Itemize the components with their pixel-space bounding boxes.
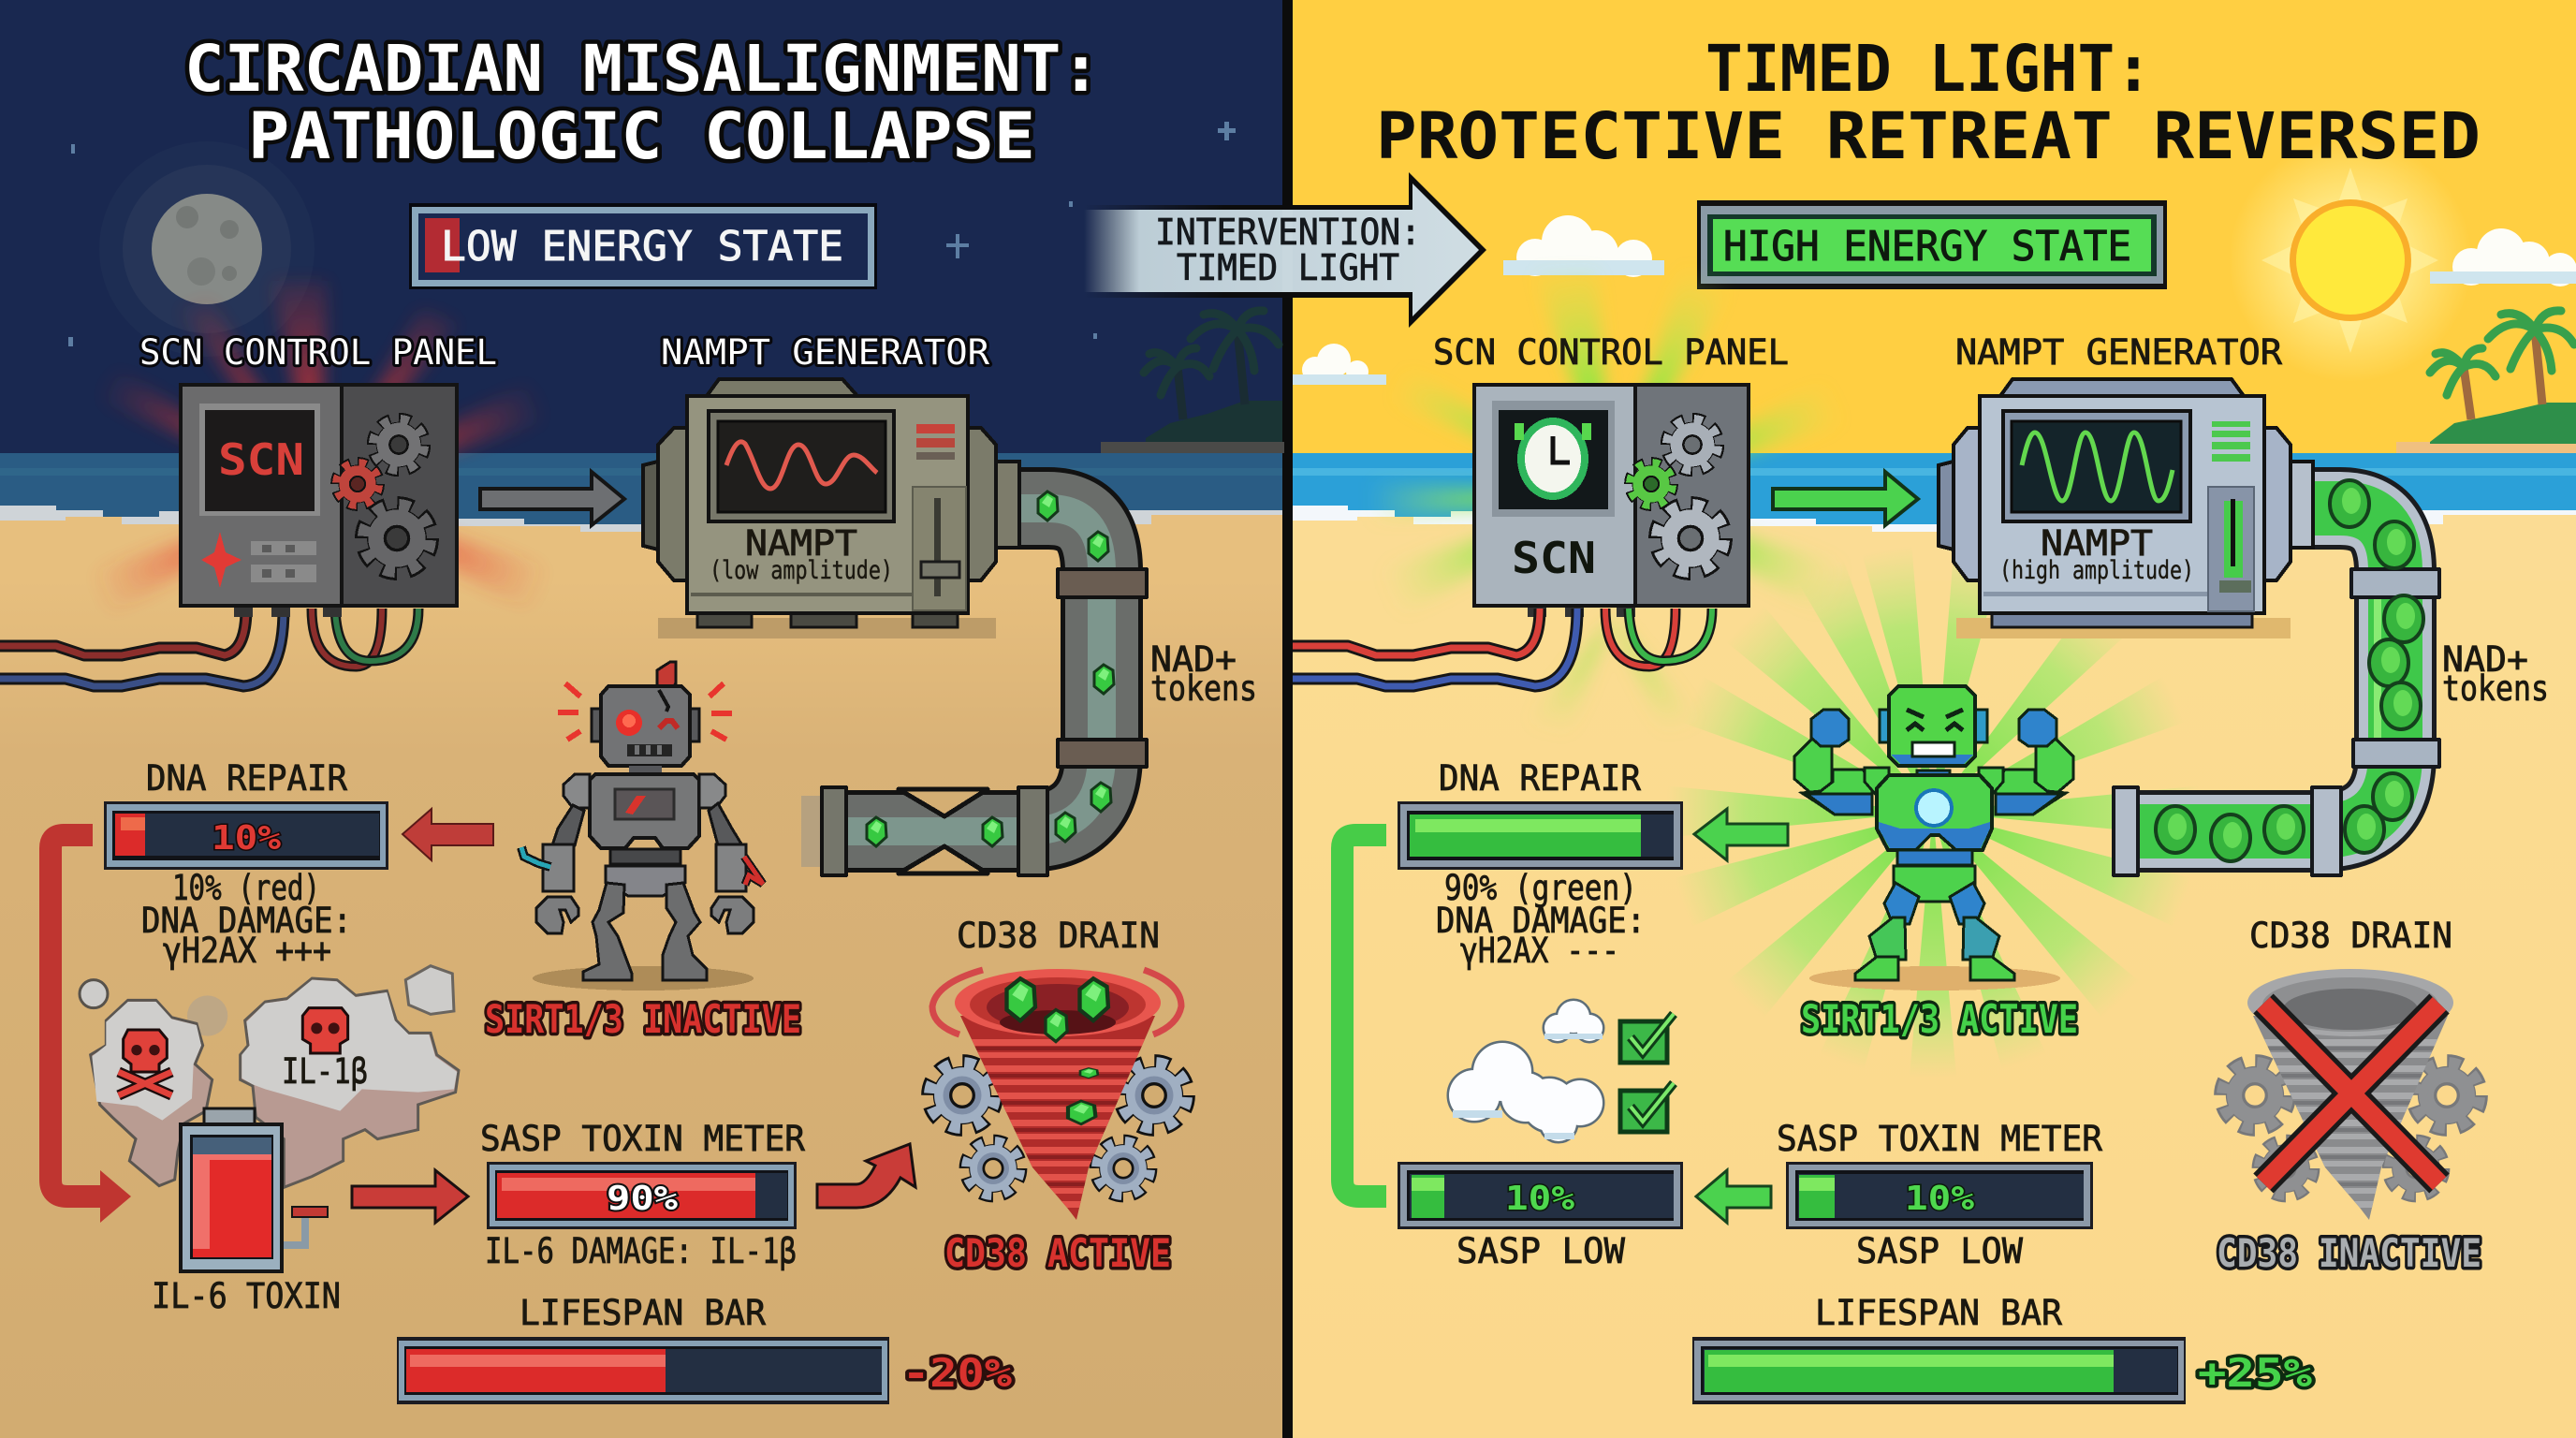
wires: left <box>0 609 418 686</box>
bar: SASP meter 10 percent: 10% <box>1905 1180 1974 1218</box>
bar: DNA repair 10 percent: 10% <box>212 819 281 858</box>
bar: DNA repair 10 percent <box>104 801 388 870</box>
icon: cloud left edge <box>1293 344 1386 385</box>
icon: clean clouds <box>1449 1001 1603 1141</box>
label: NAMPT low amplitude <box>710 523 893 585</box>
robot: active <box>1794 686 2073 990</box>
bar: SASP low first <box>1398 1162 1683 1229</box>
background: day beach <box>1288 0 2576 1438</box>
icon: moon <box>99 141 315 357</box>
SCN panel: left <box>179 383 459 617</box>
arrow: robot to DNA repair left <box>402 809 493 860</box>
arrow: intervention timed light <box>1084 172 1486 328</box>
label: CD38 inactive: CD38 INACTIVE <box>2217 1230 2481 1276</box>
label: CD38 drain left: CD38 DRAIN <box>957 916 1160 956</box>
generator: right <box>1939 379 2313 638</box>
icon: cloud right edge <box>2430 228 2576 286</box>
label: NAMPT low amplitude: NAMPT <box>745 523 857 564</box>
text: DNA damage left: DNA DAMAGE: <box>141 901 352 941</box>
arrow: robot to DNA repair right <box>1694 809 1788 860</box>
SCN panel: right <box>1472 383 1750 617</box>
pipe: right <box>2114 508 2439 875</box>
stars <box>68 122 1236 346</box>
SCN panel: right: SCN <box>1512 533 1596 583</box>
arrow: SASP to CD38 <box>817 1144 915 1208</box>
text: DNA damage right: DNA DAMAGE: <box>1436 901 1646 941</box>
label: SIRT1/3 inactive: SIRT1/3 INACTIVE <box>485 996 801 1042</box>
text: DNA damage right: γH2AX --- <box>1460 931 1619 971</box>
center divider <box>1282 0 1293 1438</box>
bar: DNA repair 90 percent <box>1398 801 1683 870</box>
label: NAD+ tokens right: tokens <box>2442 668 2549 709</box>
label: CD38 active: CD38 ACTIVE <box>944 1230 1171 1276</box>
label: CD38 drain right: CD38 DRAIN <box>2249 916 2452 956</box>
arrow: panel to generator left <box>480 472 624 525</box>
icon: checkmarks <box>1620 1014 1674 1132</box>
arrow: intervention timed light: TIMED LIGHT <box>1177 247 1399 288</box>
title: right: TIMED LIGHT: <box>1705 32 2152 107</box>
arrow: IL-6 to SASP meter <box>352 1170 468 1223</box>
label: lifespan bar right: LIFESPAN BAR <box>1815 1293 2063 1333</box>
bar: SASP low first: 10% <box>1505 1180 1574 1218</box>
title: right: PROTECTIVE RETREAT REVERSED <box>1376 99 2481 174</box>
wires: right <box>1293 609 1712 686</box>
arrow: meter to SASP low <box>1696 1170 1771 1223</box>
generator: left <box>643 379 1019 638</box>
badge: high energy state: HIGH ENERGY STATE <box>1723 223 2131 271</box>
bar: SASP meter 90 percent <box>487 1162 797 1229</box>
waveform: left <box>726 442 877 489</box>
label: SASP low second: SASP LOW <box>1856 1231 2024 1271</box>
tornado: CD38 inactive <box>2223 969 2479 1220</box>
glow: red SCN rays <box>84 281 571 618</box>
label: DNA repair right: DNA REPAIR <box>1439 758 1642 799</box>
badge: low energy state <box>409 203 877 289</box>
icon: cloud near arrow <box>1503 215 1664 277</box>
connector: green loop <box>1342 835 1386 1196</box>
label: SCN control panel right: SCN CONTROL PANEL <box>1433 332 1789 373</box>
label: lifespan bar left: LIFESPAN BAR <box>520 1293 767 1333</box>
label: NAMPT high amplitude <box>1999 523 2194 585</box>
pipe: left <box>801 508 1147 875</box>
bar: SASP meter 90 percent: 90% <box>607 1180 678 1218</box>
label: NAMPT high amplitude: NAMPT <box>2041 523 2153 564</box>
bar: lifespan right <box>1692 1337 2186 1404</box>
label: SIRT1/3 active: SIRT1/3 ACTIVE <box>1801 996 2078 1042</box>
label: NAMPT low amplitude: (low amplitude) <box>710 556 893 585</box>
label: NAMPT generator right: NAMPT GENERATOR <box>1955 332 2283 373</box>
arrow: intervention timed light: INTERVENTION: <box>1155 212 1421 253</box>
label: NAMPT generator left: NAMPT GENERATOR <box>661 332 990 373</box>
text: DNA damage left: γH2AX +++ <box>163 931 331 971</box>
waveform: right <box>2022 433 2173 501</box>
label: SASP low first: SASP LOW <box>1456 1231 1626 1271</box>
tokens: right pipe <box>2156 480 2423 861</box>
label: DNA repair left: DNA REPAIR <box>146 758 348 799</box>
glow: green SCN rays <box>1310 262 1863 758</box>
smoke cloud: skull and crossbones <box>80 980 227 1186</box>
text: DNA damage right <box>1436 868 1646 971</box>
arrow: panel to generator right <box>1773 472 1918 525</box>
label: SASP toxin meter left: SASP TOXIN METER <box>480 1119 806 1159</box>
tornado: CD38 active <box>930 969 1186 1220</box>
left arm <box>1794 710 1889 814</box>
text: IL-6 damage: IL-6 DAMAGE: IL-1β <box>485 1231 797 1271</box>
smoke cloud: IL-1 beta <box>241 966 459 1187</box>
text: DNA damage left: 10% (red) <box>172 868 320 908</box>
island: night <box>1101 311 1284 453</box>
SCN panel: left: SCN <box>218 434 304 485</box>
canister: IL-6 toxin <box>181 1108 328 1271</box>
title: left: CIRCADIAN MISALIGNMENT: <box>184 32 1101 107</box>
island: day <box>2396 311 2576 453</box>
value: minus 20 percent: -20% <box>902 1350 1012 1396</box>
label: NAD+ tokens right <box>2442 639 2549 709</box>
value: plus 25 percent: +25% <box>2198 1350 2312 1396</box>
label: IL-6 toxin: IL-6 TOXIN <box>152 1276 341 1316</box>
robot: inactive <box>521 662 763 990</box>
label: NAD+ tokens left: NAD+ <box>1150 639 1237 680</box>
glow: robot rays <box>1662 541 2203 1077</box>
text: DNA damage right: 90% (green) <box>1444 868 1637 908</box>
text: DNA damage left <box>141 868 352 971</box>
label: SCN control panel left: SCN CONTROL PANEL <box>139 332 497 373</box>
icon: sun <box>2229 139 2472 382</box>
label: NAD+ tokens right: NAD+ <box>2442 639 2528 680</box>
background: night beach <box>0 0 1284 1438</box>
title: left <box>184 32 1101 174</box>
label: NAMPT high amplitude: (high amplitude) <box>1999 556 2194 585</box>
badge: low energy state: LOW ENERGY STATE <box>441 223 843 271</box>
right arm <box>1979 710 2073 814</box>
tokens: left pipe <box>867 492 1114 846</box>
label: NAD+ tokens left: tokens <box>1150 668 1257 709</box>
smoke cloud: IL-1 beta: IL-1β <box>282 1051 368 1092</box>
badge: high energy state <box>1697 200 2167 289</box>
label: SASP toxin meter right: SASP TOXIN METER <box>1777 1119 2103 1159</box>
title: left: PATHOLOGIC COLLAPSE <box>248 99 1035 174</box>
arrow: DNA repair to IL-6 toxin <box>51 835 131 1223</box>
title: right <box>1376 32 2481 174</box>
bar: lifespan left <box>397 1337 889 1404</box>
bar: SASP meter 10 percent <box>1786 1162 2093 1229</box>
label: NAD+ tokens left <box>1150 639 1257 709</box>
